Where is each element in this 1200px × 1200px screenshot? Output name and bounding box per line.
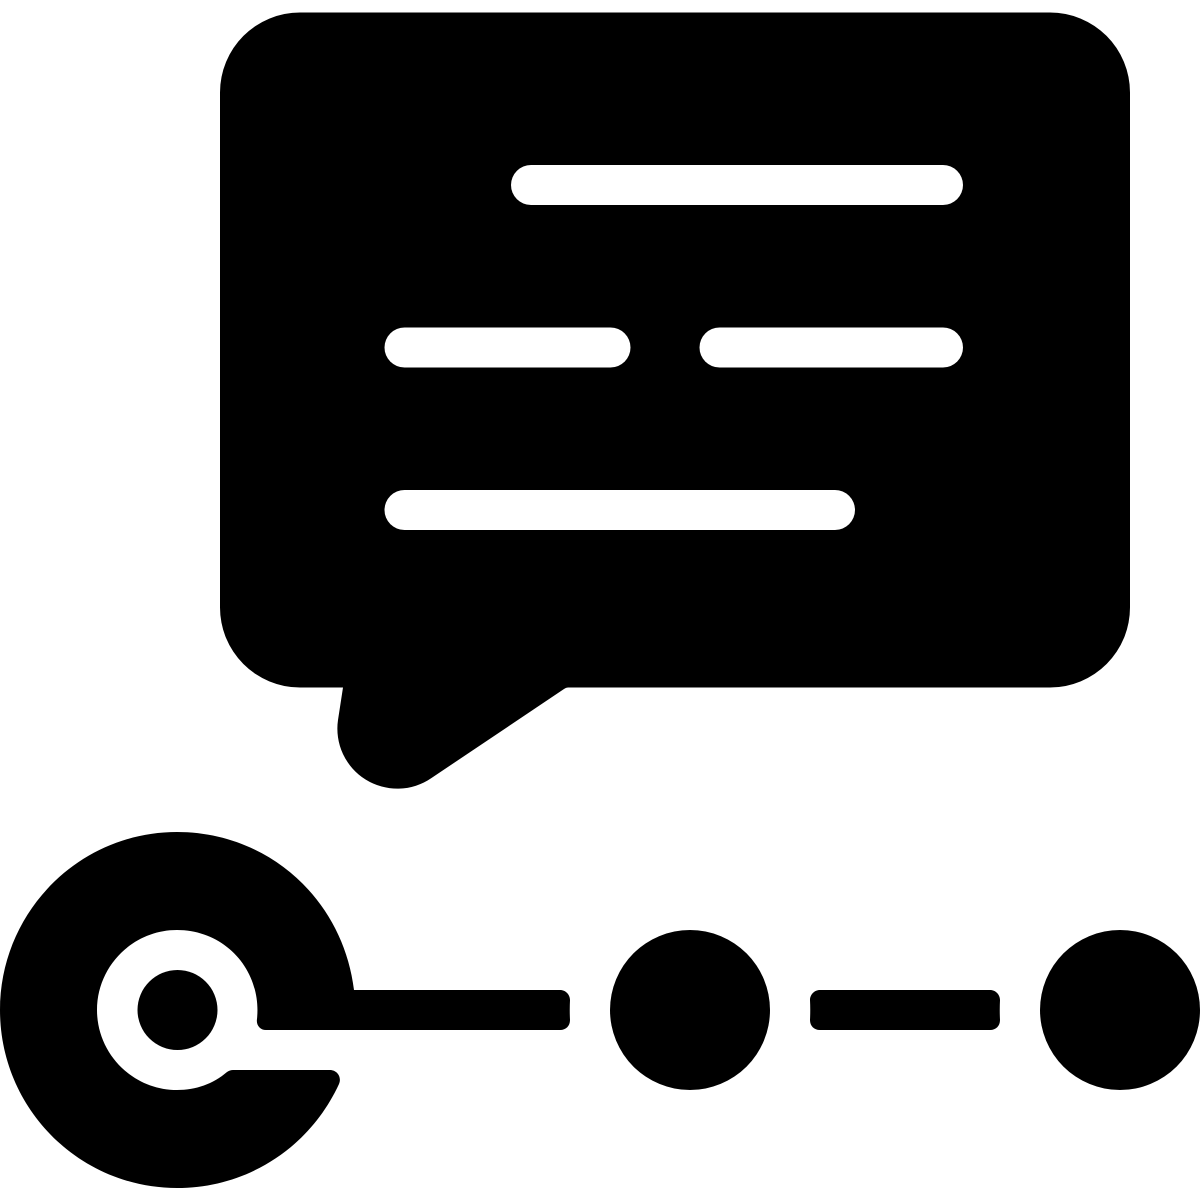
text line 2 right xyxy=(700,328,963,368)
icon: right circle xyxy=(1040,930,1200,1090)
text line 3 xyxy=(384,490,855,530)
icon: dash connector xyxy=(810,990,1000,1030)
text line 1 xyxy=(511,165,963,205)
icon: speech bubble xyxy=(220,12,1130,789)
text line 2 left xyxy=(384,328,630,368)
icon: inner dot xyxy=(138,970,218,1050)
icon: ring with connector xyxy=(0,832,570,1188)
icon: middle circle xyxy=(610,930,770,1090)
